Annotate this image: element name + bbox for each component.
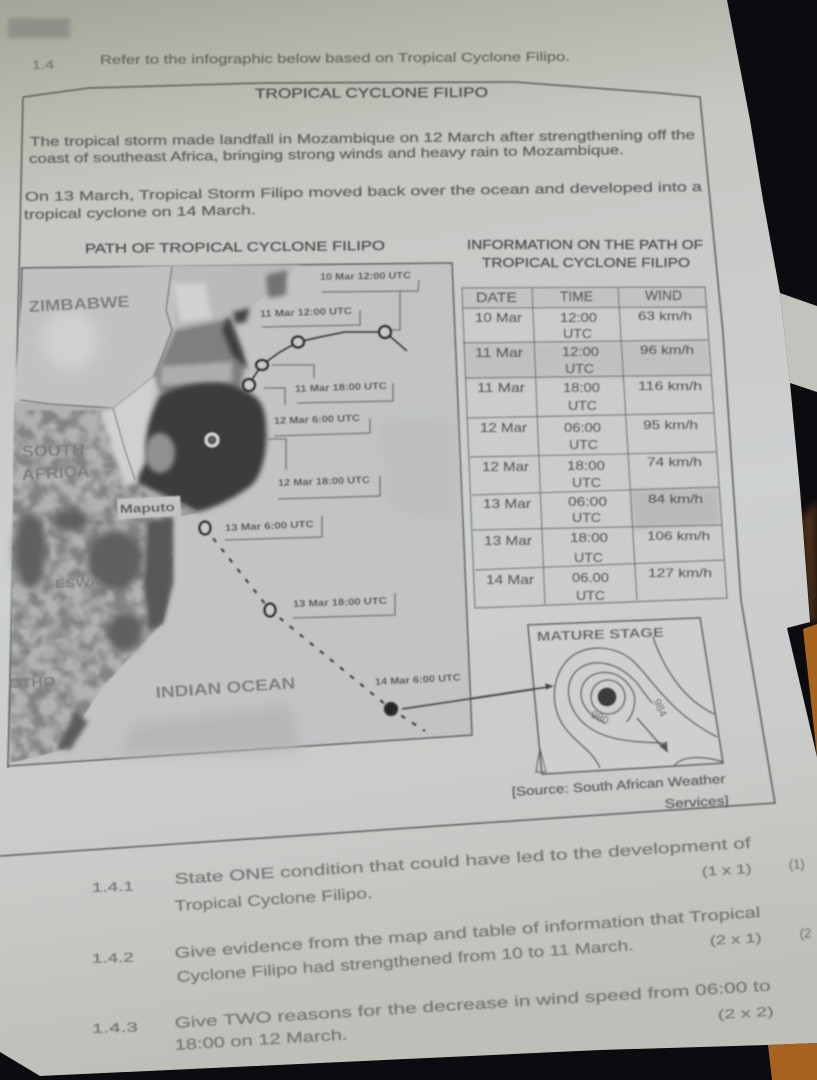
data table (462, 287, 727, 608)
question 1.4.3: 18:00 on 12 March. (174, 1026, 348, 1054)
table rows (475, 309, 712, 603)
table rows: 14 Mar (486, 572, 535, 587)
question 1.4.3: 1.4.3 (92, 1019, 138, 1036)
country labels: OTHO (8, 674, 56, 691)
table rows: 63 km/h (638, 309, 692, 323)
table header (476, 287, 682, 305)
table rows: 12:00 (562, 344, 599, 359)
coastal dark strip (144, 517, 173, 630)
source (511, 772, 729, 811)
question 1.4.1: State ONE condition that could have led to the development of (174, 835, 752, 888)
question intro (32, 50, 570, 72)
question 1.4.1: Tropical Cyclone Filipo. (174, 885, 373, 915)
map heading: PATH OF TROPICAL CYCLONE FILIPO (85, 238, 385, 256)
mature stage panel (528, 618, 723, 774)
rain shield dark blob (138, 383, 266, 512)
question 1.4.3 (92, 978, 774, 1054)
isobars (536, 637, 723, 772)
Zimbabwe border (20, 266, 172, 408)
callout labels: 13 Mar 18:00 UTC (293, 596, 387, 610)
question 1.4.2 (92, 904, 812, 986)
smudge top left (8, 18, 70, 38)
callout labels: 13 Mar 6:00 UTC (225, 519, 314, 534)
table rows: 116 km/h (638, 379, 702, 393)
land: upper land (172, 265, 300, 330)
table rows: 06:00 (564, 420, 601, 435)
land: dark terrain clumps (14, 508, 143, 652)
Maputo label: Maputo (120, 500, 175, 516)
table rows: 18:00 (563, 380, 600, 395)
country labels: SOUTH (22, 442, 85, 461)
question 1.4.3: (2 x 2) (717, 1004, 774, 1022)
table rows: 13 Mar (484, 533, 533, 548)
table rows: 18:00 (570, 530, 608, 545)
table rows: 12 Mar (482, 459, 530, 474)
callout labels: 11 Mar 12:00 UTC (260, 306, 352, 320)
callout labels (225, 270, 461, 688)
table rows: UTC (572, 510, 601, 525)
cyclone track dashed (205, 528, 425, 731)
country labels: INDIAN OCEAN (155, 675, 296, 702)
isobar labels: 980 (589, 709, 610, 727)
question intro: 1.4 (32, 58, 54, 72)
table rows: 06.00 (572, 570, 609, 585)
storm symbols (200, 326, 397, 715)
title: TROPICAL CYCLONE FILIPO (255, 85, 488, 101)
table rows: 13 Mar (483, 496, 532, 511)
table header: DATE (476, 289, 517, 305)
orange table corner (768, 1043, 817, 1080)
callout leaders (225, 280, 419, 618)
source: Services] (664, 794, 729, 811)
cyclone track solid (248, 332, 407, 385)
land: Mozambique north (155, 318, 245, 393)
callout labels: 14 Mar 6:00 UTC (375, 673, 461, 688)
map: path of cyclone (8, 263, 472, 766)
intro paragraphs: coast of southeast Africa, bringing strong winds and heavy rain to Mozambique. (29, 142, 624, 166)
question 1.4.2: Cyclone Filipo had strengthened from 10 to 11 March. (176, 937, 634, 986)
land: South Africa (10, 402, 197, 763)
table rows: UTC (569, 437, 598, 452)
land: Mozambique south strip (100, 375, 155, 485)
question 1.4.2: Give evidence from the map and table of information that Tropical (174, 904, 761, 962)
table heading (467, 237, 703, 270)
table rows: 95 km/h (643, 418, 698, 432)
table rows: UTC (563, 326, 592, 341)
table rows: UTC (574, 550, 603, 565)
question 1.4.3: Give TWO reasons for the decrease in wind speed from 06:00 to (174, 978, 771, 1032)
question 1.4.2: 1.4.2 (92, 950, 134, 966)
infographic outer frame (0, 82, 775, 856)
brown surface behind page (800, 500, 817, 622)
table rows: 06:00 (568, 494, 607, 509)
country labels: AFRICA (21, 463, 91, 484)
table rows: 127 km/h (648, 566, 712, 580)
table rows: 18:00 (567, 458, 605, 473)
table rows: UTC (568, 398, 597, 413)
table heading: TROPICAL CYCLONE FILIPO (482, 255, 690, 270)
intro paragraphs (24, 127, 703, 222)
table rows: 74 km/h (647, 455, 702, 469)
intro paragraphs: The tropical storm made landfall in Mozambique on 12 March after strengthening off the (30, 127, 695, 149)
table rows: 10 Mar (475, 310, 523, 325)
table header: WIND (645, 287, 682, 303)
question intro: Refer to the infographic below based on Tropical Cyclone Filipo. (100, 50, 570, 67)
Maputo label (117, 496, 181, 519)
land: terrain texture (10, 410, 200, 765)
land: Zimbabwe (14, 266, 175, 408)
table rows: UTC (565, 361, 594, 376)
table rows: UTC (576, 588, 605, 603)
table rows: 11 Mar (477, 380, 526, 395)
question 1.4.1: (1) (788, 856, 805, 872)
cyclone eye (598, 688, 616, 706)
table rows: 12 Mar (480, 420, 528, 435)
loose sheet at right (780, 293, 817, 392)
question 1.4.1 (92, 835, 805, 915)
country labels: ESWA (54, 575, 102, 591)
table rows: 12:00 (560, 310, 597, 325)
table rows: 106 km/h (647, 529, 710, 543)
orange table edge (803, 624, 817, 757)
callout labels: 11 Mar 18:00 UTC (295, 381, 387, 395)
intro paragraphs: On 13 March, Tropical Storm Filipo moved back over the ocean and developed into a (25, 179, 703, 204)
source: [Source: South African Weather (511, 772, 726, 799)
ocean shading (120, 705, 300, 755)
question 1.4.1: 1.4.1 (92, 879, 134, 895)
panel title: MATURE STAGE (537, 625, 664, 644)
question 1.4.2: (2 x 1) (709, 930, 762, 948)
table rows: 96 km/h (640, 343, 694, 357)
callout labels: 12 Mar 6:00 UTC (274, 413, 360, 427)
direction arrow (637, 718, 668, 753)
question 1.4.1: (1 x 1) (701, 861, 752, 879)
table heading: INFORMATION ON THE PATH OF (467, 237, 703, 252)
arrow to mature stage (402, 683, 554, 709)
Zimbabwe mottling (42, 310, 98, 370)
callout labels: 10 Mar 12:00 UTC (320, 270, 411, 283)
country labels (8, 294, 296, 702)
table rows: UTC (572, 475, 601, 490)
table rows: 84 km/h (648, 492, 703, 506)
mature stage panel: 984 (650, 697, 669, 719)
table grid (462, 287, 727, 608)
question 1.4.2: (2 (799, 925, 812, 941)
country labels: ZIMBABWE (28, 294, 130, 316)
table rows: 11 Mar (475, 345, 524, 360)
callout labels: 12 Mar 18:00 UTC (278, 475, 370, 489)
intro paragraphs: tropical cyclone on 14 March. (24, 202, 256, 222)
table header: TIME (560, 288, 593, 304)
